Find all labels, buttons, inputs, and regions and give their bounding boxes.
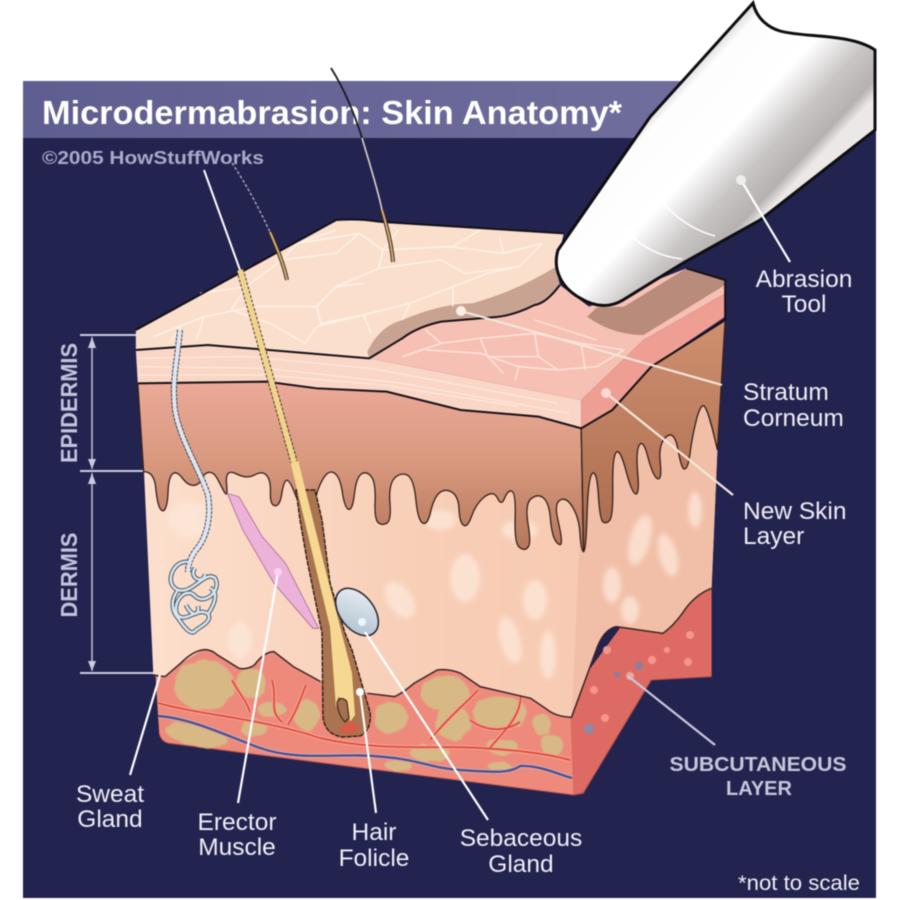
front stratum band [136, 345, 581, 428]
tan step [367, 267, 560, 358]
epidermis label: EPIDERMIS [56, 343, 82, 463]
label: abrasion tool: Abrasion [756, 266, 852, 293]
label: sebaceous gland: Sebaceous [460, 825, 582, 852]
hair shaft [204, 170, 294, 462]
abrasion tool [556, 3, 875, 306]
sebaceous gland [327, 580, 387, 644]
subcutaneous layer [153, 587, 712, 795]
label: abrasion tool: Tool [782, 291, 826, 318]
sweat gland [171, 330, 217, 632]
erector muscle [227, 493, 319, 628]
leader lines [130, 175, 790, 820]
gland coil [171, 562, 217, 632]
label: hair follicle: Hair [352, 819, 396, 846]
title bar [23, 81, 693, 138]
follicle shaft core [290, 460, 355, 722]
label: subcutaneous layer: LAYER [726, 778, 793, 800]
tool shadow [587, 268, 725, 335]
skin outlines [136, 219, 725, 428]
epidermis right face [581, 320, 725, 552]
label: stratum corneum: Stratum [743, 379, 829, 406]
fat deposits [162, 660, 563, 772]
label: sweat gland: Gland [77, 806, 143, 833]
label: new skin layer: New Skin [743, 498, 846, 525]
footnote: *not to scale [738, 872, 860, 895]
skin block [136, 68, 725, 795]
right edge band [581, 293, 725, 428]
copyright: ©2005 HowStuffWorks [42, 148, 264, 168]
dermis label: DERMIS [56, 532, 82, 618]
label: new skin layer: Layer [743, 523, 804, 550]
title: Microdermabrasion: Skin Anatomy* [42, 94, 622, 131]
label: stratum corneum: Corneum [743, 405, 844, 432]
label: erector muscle: Erector [198, 809, 276, 836]
label: hair follicle: Folicle [339, 845, 409, 872]
hair bulb [337, 698, 349, 722]
side labels: epidermis and dermis scale [56, 335, 165, 673]
label: subcutaneous layer: SUBCUTANEOUS [670, 754, 846, 776]
label: sweat gland: Sweat [76, 781, 144, 808]
epidermis [136, 219, 725, 552]
subcutaneous dots [584, 631, 694, 734]
dermis highlights [168, 492, 702, 679]
exposed new skin [369, 268, 725, 400]
dermis [144, 393, 717, 717]
bulb blood supply [338, 720, 360, 734]
upper hair [331, 68, 393, 262]
hair follicle [290, 460, 370, 737]
epidermis front face [138, 382, 584, 552]
band strata lines [138, 357, 570, 413]
exposed skin cracks [402, 320, 624, 380]
small hair [232, 163, 287, 280]
tool ring lines [622, 185, 715, 259]
label: sebaceous gland: Gland [488, 851, 554, 878]
top surface [136, 219, 564, 358]
label: erector muscle: Muscle [198, 834, 276, 861]
surface cracks [153, 230, 542, 343]
blood vessels [158, 680, 572, 778]
